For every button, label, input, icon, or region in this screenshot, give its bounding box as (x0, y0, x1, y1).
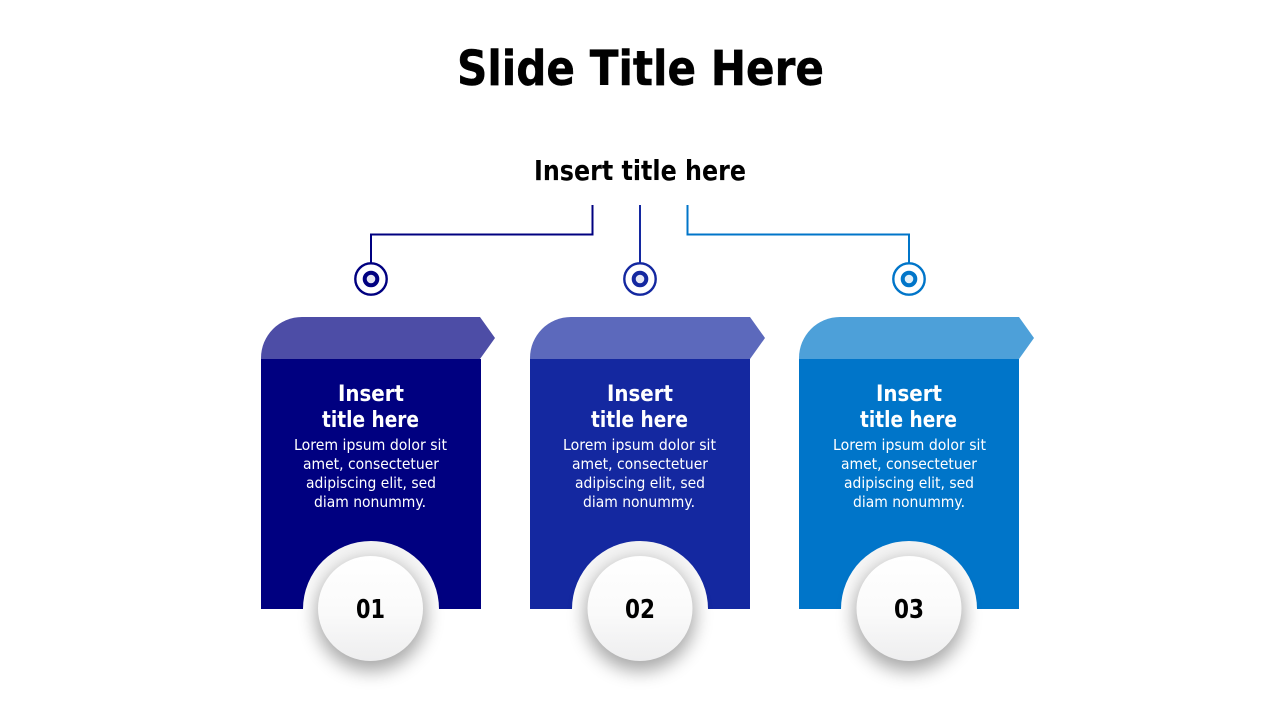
card 3 text: amet, consectetuer (841, 455, 978, 473)
card 1 text: Lorem ipsum dolor sit (294, 436, 447, 454)
card 2 text: Lorem ipsum dolor sit (563, 436, 716, 454)
subtitle: Insert title here (534, 154, 746, 187)
card 1 heading: Insert (338, 381, 404, 407)
connector: middle (639, 205, 641, 263)
card 3 number badge (841, 541, 977, 677)
card 1 tab (261, 317, 495, 359)
card 1 heading (322, 381, 419, 433)
icon: target 2 (624, 263, 656, 295)
card 2 number badge (572, 541, 708, 677)
card 3 number badge: 03 (894, 595, 924, 625)
panel: card 3 (799, 263, 1034, 677)
card 2 text: adipiscing elit, sed (575, 474, 705, 492)
card 1 heading: title here (322, 407, 419, 433)
connector: left (371, 205, 592, 263)
card 3 text: Lorem ipsum dolor sit (833, 436, 986, 454)
card 3 text (833, 436, 986, 511)
card 3 heading: Insert (876, 381, 942, 407)
card 2 text: amet, consectetuer (572, 455, 709, 473)
card 2 text (563, 436, 716, 511)
card 2 heading (591, 381, 688, 433)
card 1 text: adipiscing elit, sed (306, 474, 436, 492)
card 2 tab (530, 317, 765, 359)
card 3 body (799, 359, 1019, 609)
card 1 text: amet, consectetuer (303, 455, 440, 473)
card 1 text (294, 436, 447, 511)
card 2 body (530, 359, 750, 609)
card 2 heading: Insert (607, 381, 673, 407)
panel: card 1 (261, 263, 495, 677)
card 1 number badge: 01 (356, 595, 385, 625)
card 1 body (261, 359, 481, 609)
card 1 number badge (303, 541, 439, 677)
card 3 heading (860, 381, 957, 433)
card 3 heading: title here (860, 407, 957, 433)
card 2 number badge: 02 (625, 595, 655, 625)
card 2 text: diam nonummy. (583, 493, 695, 511)
card 3 text: diam nonummy. (853, 493, 965, 511)
title: Slide Title Here (457, 41, 824, 97)
connector: right (688, 205, 909, 263)
card 1 text: diam nonummy. (314, 493, 426, 511)
card 2 heading: title here (591, 407, 688, 433)
panel: card 2 (530, 263, 765, 677)
card 3 text: adipiscing elit, sed (844, 474, 974, 492)
icon: target 3 (893, 263, 925, 295)
icon: target 1 (355, 263, 387, 295)
card 3 tab (799, 317, 1034, 359)
